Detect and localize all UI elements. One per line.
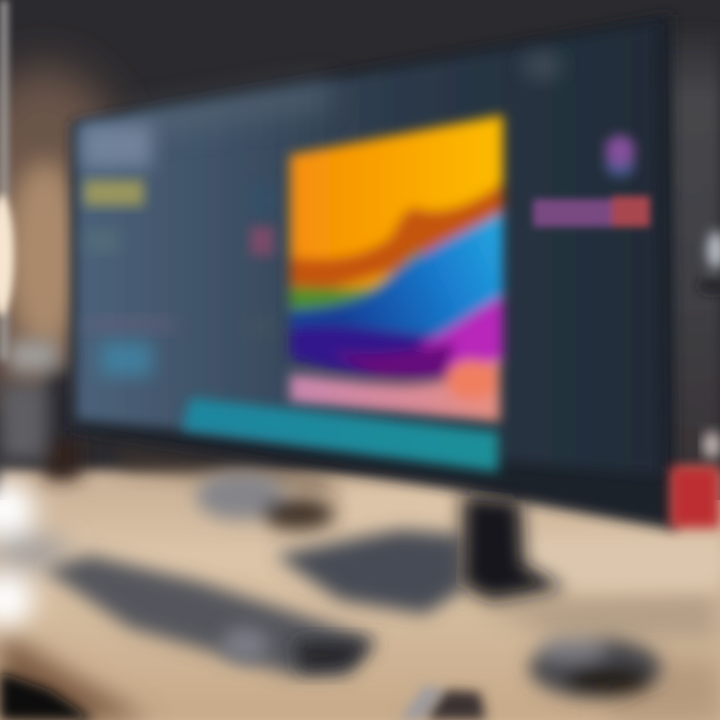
- chart: magenta layer: [420, 296, 503, 378]
- circle icon on screen: [605, 135, 635, 177]
- chart: red-orange ridge: [290, 182, 503, 300]
- white items at left of desk: [0, 482, 70, 626]
- screen dim patches and text blocks: [82, 52, 562, 376]
- background small device: [196, 472, 334, 530]
- monitor screen: [76, 24, 660, 475]
- chart: pink layer: [290, 360, 500, 422]
- mouse bottom: [400, 684, 488, 720]
- keyboard: [45, 555, 376, 674]
- monitor body: [72, 14, 676, 530]
- shadow at bottom left: [0, 630, 150, 720]
- chart: orange layer: [290, 115, 503, 300]
- red object at right edge: [670, 431, 720, 528]
- white device at right edge: [698, 231, 720, 292]
- teal bar under chart: [182, 398, 498, 472]
- chart: green layer: [290, 248, 420, 330]
- speaker at left: [0, 340, 80, 480]
- chart: blue layer: [290, 212, 503, 345]
- chart: purple layer: [290, 326, 470, 379]
- area chart: [290, 115, 503, 422]
- desk surface: [0, 470, 720, 720]
- chart: salmon patch: [446, 360, 498, 400]
- monitor stand: [275, 495, 565, 614]
- window light at left edge: [0, 0, 14, 360]
- right pink and red label: [533, 196, 650, 227]
- shadow under monitor on desk: [120, 450, 330, 490]
- mouse right: [529, 638, 661, 698]
- chart: deep purple lower: [330, 342, 455, 378]
